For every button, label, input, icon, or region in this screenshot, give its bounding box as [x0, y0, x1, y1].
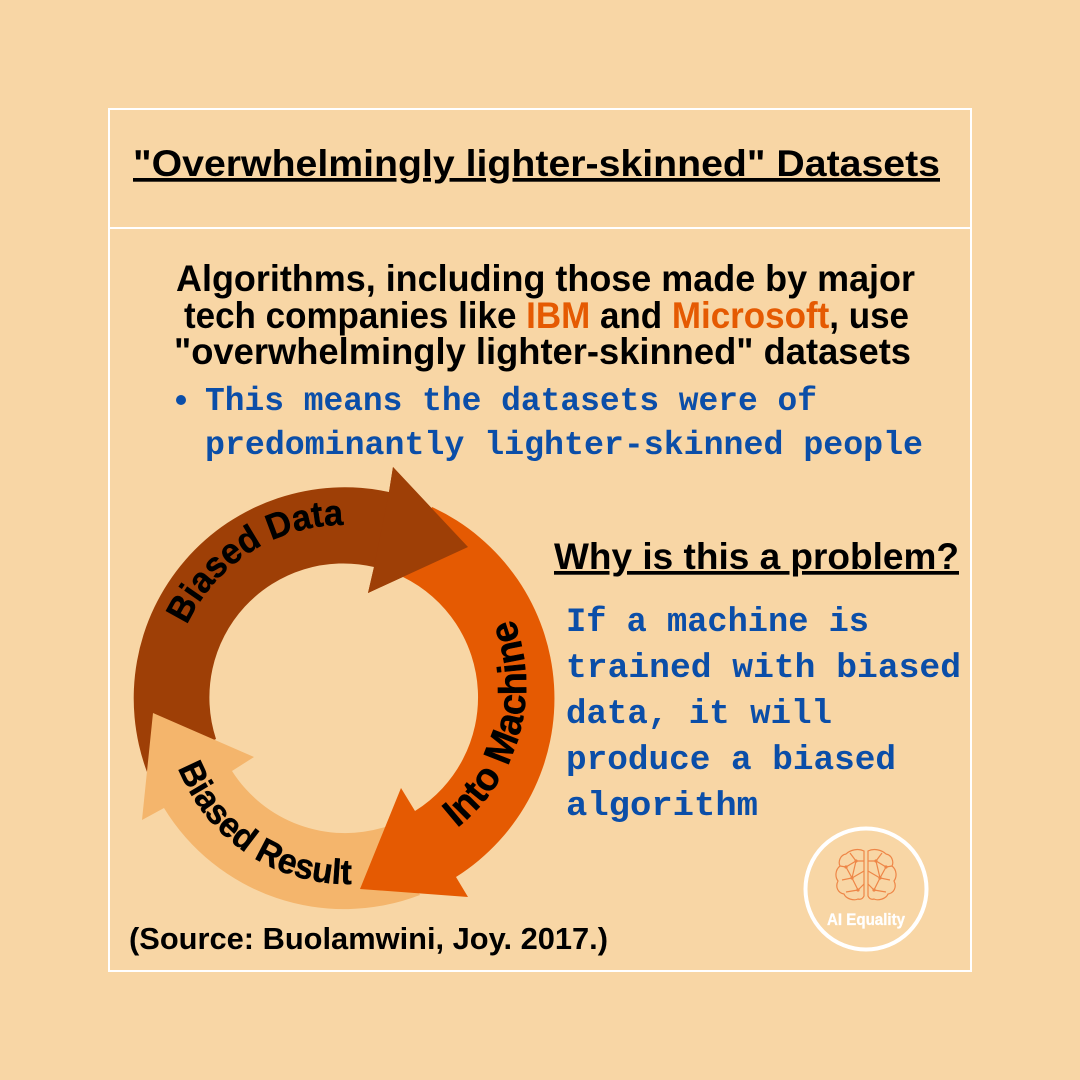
text block: problem explanation: data, it will [566, 695, 832, 734]
label: biased result: Biased Result [178, 760, 352, 885]
text block: problem explanation: If a machine is [566, 603, 869, 642]
heading: why is this a problem: Why is this a problem? [554, 536, 959, 577]
text block: problem explanation: trained with biased [566, 649, 961, 688]
arrow: biased data [134, 467, 468, 772]
logo wordmark: AI Equality [827, 911, 906, 929]
text block: intro statement: "overwhelmingly lighter-skinned" datasets [174, 331, 911, 372]
arrow: into machine [360, 507, 554, 897]
text block: problem explanation [566, 603, 961, 826]
source citation: (Source: Buolamwini, Joy. 2017.) [129, 921, 608, 956]
text block: bullet explanation [176, 383, 923, 464]
arrow: biased result [142, 713, 420, 909]
icon: AI Equality logo [806, 828, 926, 950]
panel: white frame [109, 109, 971, 971]
icon: brain network [836, 850, 896, 900]
chart: biased data cycle [134, 467, 554, 910]
label: biased data: Biased Data [166, 502, 344, 624]
text block: problem explanation: algorithm [566, 787, 758, 826]
text block: intro statement: Algorithms, including those made by major [176, 258, 915, 299]
text block: intro statement [174, 258, 915, 372]
arrow: biased data head [368, 467, 468, 593]
title: "Overwhelmingly lighter-skinned" Datasets [133, 143, 940, 184]
text block: intro statement: tech companies like IBM and Microsoft, use [184, 295, 909, 336]
text block: bullet explanation: predominantly lighter-skinned people [205, 427, 923, 464]
text block: bullet explanation: This means the datasets were of [205, 383, 817, 420]
text block: problem explanation: produce a biased [566, 741, 896, 780]
label: into machine: Into Machine [441, 622, 526, 827]
